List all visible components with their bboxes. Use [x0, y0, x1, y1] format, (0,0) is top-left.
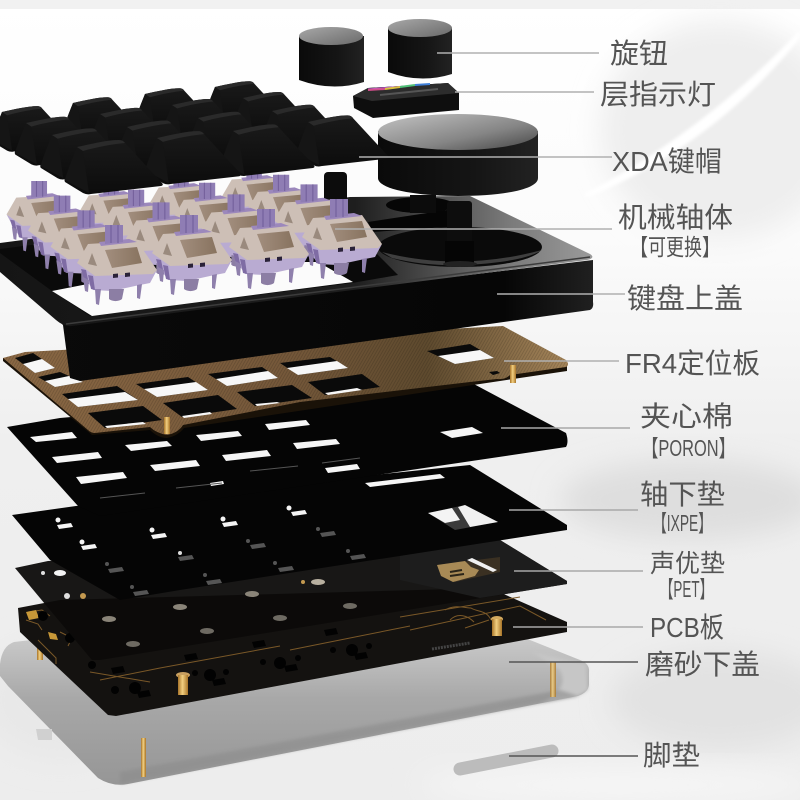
- plate windows dark: [15, 344, 494, 428]
- label: layer indicator: 层指示灯: [600, 79, 716, 110]
- label: sound pad: 声优垫: [650, 550, 725, 578]
- large dial knob: [378, 114, 538, 196]
- foot pad shadow under case: [36, 729, 52, 740]
- PCB holes: [38, 611, 372, 698]
- rainbow strip: [368, 84, 430, 89]
- layer indicator block: [353, 83, 459, 118]
- label: knob: 旋钮: [610, 38, 668, 69]
- label: top case: 键盘上盖: [627, 283, 743, 314]
- rotary knob left: [299, 27, 364, 87]
- label: mechanical switch: 机械轴体: [618, 202, 733, 233]
- plate underside: [3, 358, 567, 438]
- PCB gold standoff left: [176, 672, 190, 695]
- label: PCB: PCB板: [650, 612, 724, 643]
- upper well: [386, 197, 454, 213]
- tray edge highlight: [66, 257, 590, 324]
- gold post right: [550, 662, 556, 697]
- mechanical switches: [7, 163, 382, 305]
- white window: [52, 262, 353, 316]
- PCB board: [18, 588, 567, 716]
- plate windows white: [23, 350, 494, 428]
- PORON foam layer: [7, 382, 568, 516]
- bottom frosted case: [0, 628, 589, 785]
- XDA keycaps: [0, 81, 389, 194]
- label: XDA keycaps: XDA键帽: [612, 146, 722, 177]
- small plate hole: [489, 371, 500, 375]
- gold post right: [510, 365, 516, 383]
- FR4 gold plate: [3, 326, 568, 438]
- PET sound pad: [15, 540, 567, 660]
- PET holes: [41, 570, 357, 647]
- dial well: [378, 227, 542, 267]
- keyboard top case: [0, 172, 593, 381]
- foam slots: [30, 420, 483, 487]
- foot pad: [460, 751, 552, 769]
- label: PORON: 【PORON】: [642, 435, 735, 461]
- gold post left: [37, 638, 43, 660]
- PCB gold standoff right: [491, 616, 503, 636]
- gold post front: [141, 738, 146, 777]
- plate body: [3, 326, 568, 435]
- rotary knob right: [388, 19, 452, 79]
- small knob stem: [324, 172, 347, 202]
- PCB traces: [26, 597, 546, 682]
- leader lines: [335, 53, 643, 756]
- slot: [368, 210, 447, 232]
- IXPE small holes: [56, 506, 366, 596]
- PCB silk print: [432, 643, 470, 649]
- label: frosted bottom case: 磨砂下盖: [645, 649, 760, 680]
- label: foam: 夹心棉: [640, 401, 733, 432]
- IXPE under-switch pad: [12, 465, 567, 600]
- tray cavity: [0, 207, 398, 316]
- label: under-switch pad: 轴下垫: [640, 479, 725, 510]
- label: foot pad: 脚垫: [643, 740, 700, 771]
- dial shaft: [410, 195, 477, 267]
- label: IXPE: 【IXPE】: [653, 510, 712, 536]
- label: FR4 plate: FR4定位板: [625, 348, 760, 379]
- label: replaceable: 【可更换】: [630, 234, 720, 260]
- IXPE right window: [428, 505, 498, 530]
- gold post centre: [164, 417, 170, 434]
- label: PET: 【PET】: [660, 576, 713, 602]
- PET chip trace: [437, 557, 500, 582]
